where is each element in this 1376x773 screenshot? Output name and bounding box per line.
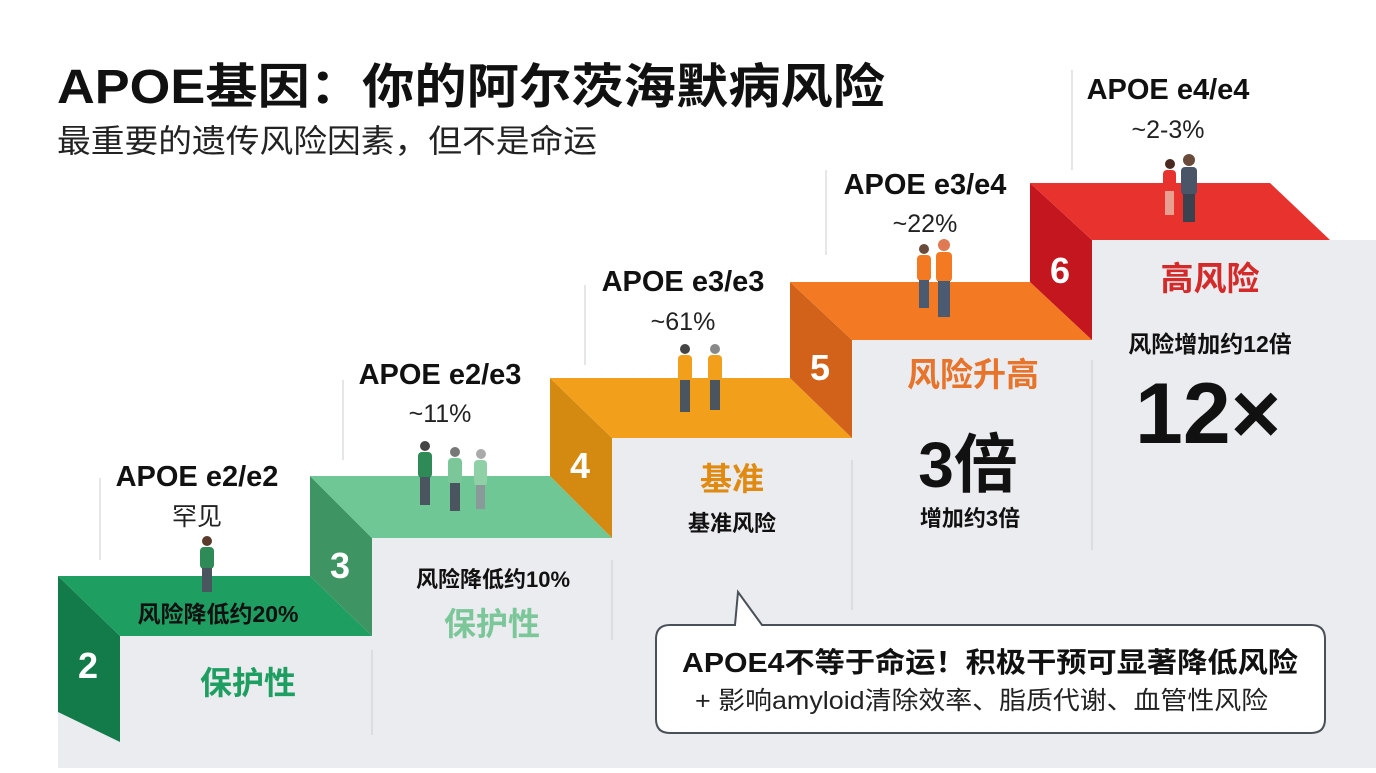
title: APOE基因：你的阿尔茨海默病风险 (57, 61, 885, 114)
step 2 text (137, 601, 299, 701)
step 3: 3 (330, 545, 350, 586)
step 5 (790, 282, 1092, 438)
step 2 text: 保护性 (200, 665, 296, 701)
callout: + 影响amyloid清除效率、脂质代谢、血管性风险 (695, 687, 1268, 715)
label e4/e4 (1087, 74, 1249, 144)
callout (656, 592, 1325, 733)
step 2: 2 (78, 645, 98, 686)
label e3/e3: APOE e3/e3 (602, 266, 764, 298)
label e2/e3: ~11% (409, 400, 471, 428)
step 6: 6 (1050, 250, 1070, 291)
step 3 (310, 476, 612, 636)
step 5 text: 增加约3倍 (920, 506, 1020, 531)
label e3/e4 (844, 169, 1006, 238)
label e2/e2 (116, 461, 278, 531)
step 4: 4 (570, 445, 590, 486)
step 6 text (1128, 260, 1292, 462)
step 6 text: 风险增加约12倍 (1128, 331, 1292, 357)
label e2/e2: APOE e2/e2 (116, 461, 278, 493)
label e3/e4: ~22% (893, 210, 957, 238)
label e2/e2: 罕见 (172, 503, 222, 531)
step 3 text: 风险降低约10% (416, 567, 570, 592)
step 6 text: 12× (1135, 366, 1281, 462)
label e3/e4: APOE e3/e4 (844, 169, 1006, 201)
step 3 text: 保护性 (444, 606, 540, 642)
step 2 text: 风险降低约20% (137, 601, 299, 627)
step 4 text (688, 461, 776, 536)
label e4/e4: APOE e4/e4 (1087, 74, 1249, 106)
gray body of stairs (58, 240, 1376, 768)
step 4 (550, 378, 852, 538)
label e2/e3: APOE e2/e3 (359, 359, 521, 391)
step 5 text: 3倍 (918, 429, 1018, 501)
callout: APOE4不等于命运！积极干预可显著降低风险 (682, 646, 1298, 678)
label e3/e3 (602, 266, 764, 336)
step 2 (58, 576, 372, 742)
step 3 text (416, 567, 570, 642)
step 6 text: 高风险 (1160, 260, 1260, 297)
label e3/e3: ~61% (651, 308, 715, 336)
subtitle: 最重要的遗传风险因素，但不是命运 (57, 123, 597, 159)
label e2/e3 (359, 359, 521, 428)
step 6 (1030, 183, 1330, 340)
step 5 text (907, 356, 1039, 531)
step 4 text: 基准 (700, 461, 764, 497)
step 4 text: 基准风险 (688, 511, 776, 536)
step 5: 5 (810, 347, 830, 388)
label e4/e4: ~2-3% (1132, 116, 1204, 144)
people figures (200, 154, 1197, 592)
step 5 text: 风险升高 (907, 356, 1039, 393)
